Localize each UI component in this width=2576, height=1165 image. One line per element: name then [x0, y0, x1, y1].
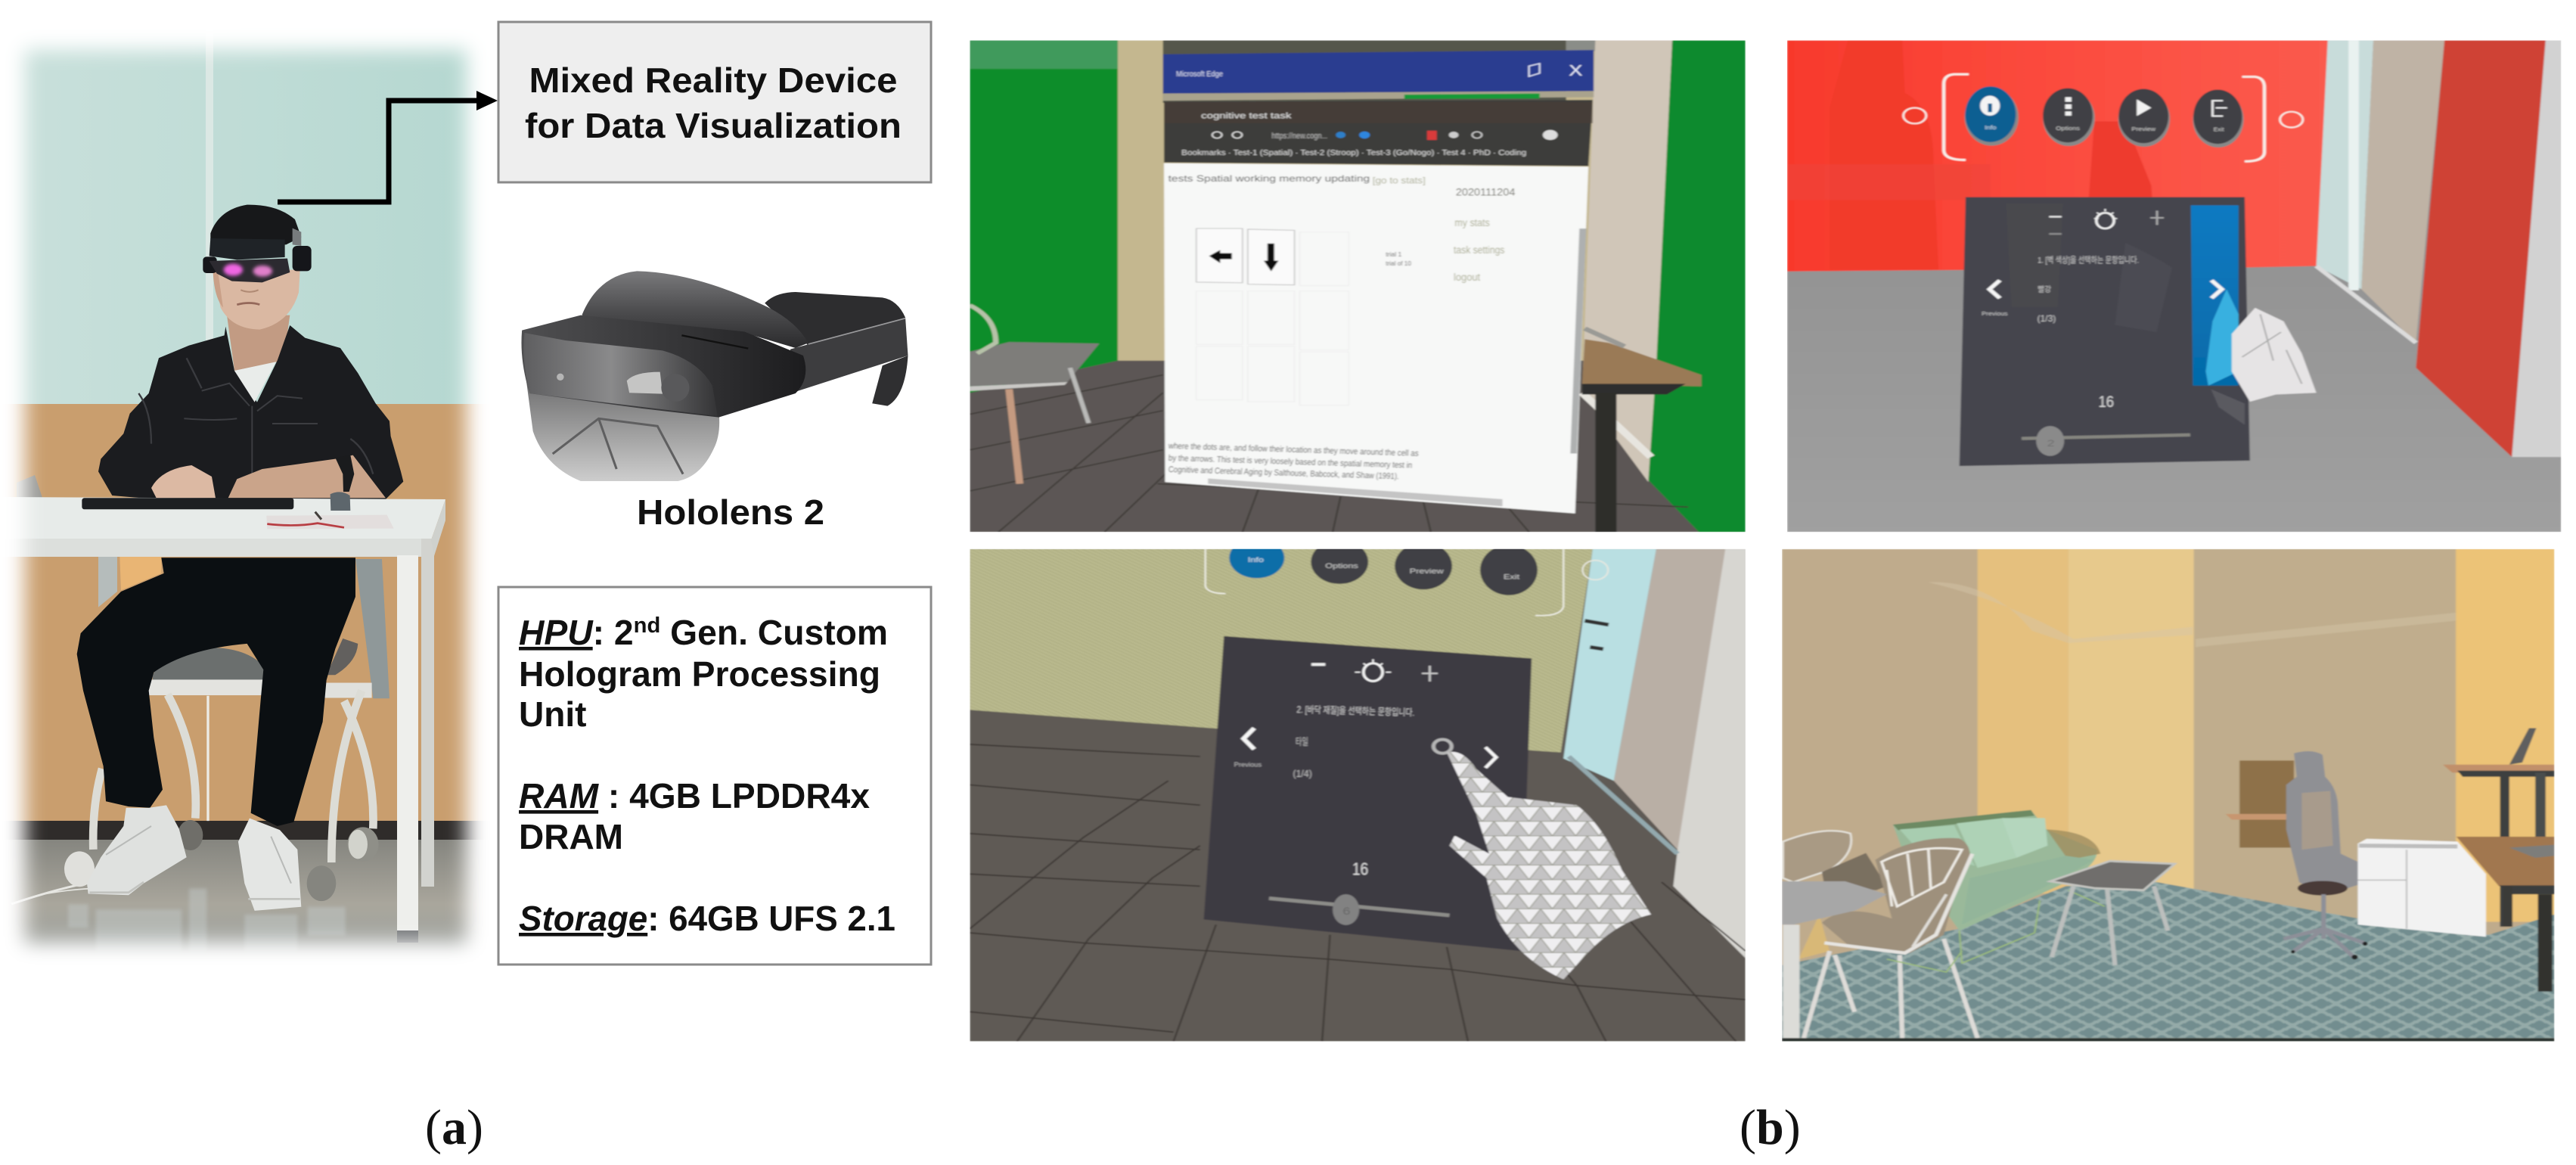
jacket and head — [98, 205, 403, 499]
room background — [970, 40, 1746, 532]
floor tile lines — [970, 375, 1688, 532]
floor tile lines — [970, 744, 1746, 1042]
browser page: task settings — [1454, 244, 1504, 256]
label box: mixed reality device: for Data Visualization — [525, 106, 902, 145]
partial menu at top: Info — [1248, 556, 1264, 564]
button: exit: Exit — [2214, 126, 2224, 132]
chair and legs of the seated person — [45, 556, 390, 951]
question panel: Previous — [1982, 310, 2008, 317]
menu brackets — [1904, 74, 2303, 161]
button: preview: Preview — [2131, 126, 2155, 132]
room background — [970, 549, 1746, 1042]
question panel: 1. [벽 색상]을 선택하는 문항입니다. — [2038, 255, 2139, 265]
hands, watch and desk items — [82, 455, 394, 529]
hand mesh — [1447, 752, 1651, 980]
browser page: trial 1 — [1386, 251, 1401, 258]
spec: RAM: RAM : 4GB LPDDR4x — [519, 776, 870, 815]
wicker chairs and table — [1782, 831, 1978, 1038]
hand mesh — [2206, 289, 2317, 425]
browser page: tests Spatial working memory updating — [1169, 174, 1370, 184]
label: Hololens 2: Hololens 2 — [637, 492, 824, 532]
wall shelf — [2226, 760, 2312, 848]
question panel: 6 — [1342, 906, 1351, 917]
question panel: 16 — [2099, 392, 2114, 411]
panel: virtual office room — [1782, 549, 2555, 1042]
browser page — [1164, 163, 1588, 514]
browser page: where the dots are, and follow their location as they move around the cell as — [1168, 441, 1419, 458]
walls — [1782, 549, 2555, 1042]
question panel: 2. [바닥 재질]을 선택하는 문항입니다. — [1296, 704, 1415, 719]
partial menu at top: Options — [1325, 562, 1358, 570]
panel: photo of seated person wearing headset — [0, 23, 499, 968]
menu buttons — [1965, 86, 2244, 148]
label box: mixed reality device — [498, 22, 931, 182]
spec: HPU — [519, 613, 888, 734]
spec: storage: Storage: 64GB UFS 2.1 — [519, 899, 895, 938]
button: options: Options — [2056, 125, 2080, 131]
desk on the right — [1582, 328, 1702, 532]
browser page: [go to stats] — [1373, 176, 1426, 186]
wall and floor background — [0, 23, 499, 968]
browser page: by the arrows. This test is very loosely based on the spatial memory test in — [1168, 453, 1413, 471]
question panel: 2 — [2047, 439, 2055, 449]
spec: RAM — [519, 776, 870, 856]
question panel: 빨강 — [2038, 284, 2051, 294]
browser page: 2020111204 — [1456, 186, 1515, 198]
panel: question panel with pointing hand — [970, 538, 1746, 1042]
desk — [0, 497, 445, 943]
partial menu at top: Preview — [1410, 567, 1445, 575]
browser toolbar — [1164, 100, 1593, 166]
spec: HPU: Unit — [519, 694, 586, 734]
carpet floor — [1782, 882, 2555, 1038]
browser toolbar: cognitive test task — [1201, 111, 1292, 121]
specifications box — [498, 587, 931, 965]
icon: Hololens 2 headset — [521, 271, 908, 481]
chair — [45, 556, 390, 901]
spec: HPU: nd — [634, 614, 660, 638]
spec: HPU: HPU: 2 — [519, 613, 633, 652]
browser title bar: Microsoft Edge — [1176, 70, 1223, 78]
spec: HPU: Hologram Processing — [519, 654, 880, 694]
question panel — [1204, 636, 1532, 951]
button: preview — [2118, 89, 2170, 147]
label box: mixed reality device: Mixed Reality Device — [529, 61, 897, 100]
browser title bar: X — [1569, 61, 1583, 79]
spec: HPU: Gen. Custom — [660, 613, 888, 652]
browser page: logout — [1454, 271, 1480, 283]
room background — [1787, 40, 2561, 532]
question panel: 16 — [1352, 859, 1368, 879]
sneakers — [68, 805, 346, 951]
caption (a): (a) — [425, 1100, 483, 1155]
button: info: Info — [1985, 124, 1996, 130]
panel: browser task view in green room — [970, 40, 1746, 532]
button: options — [2043, 89, 2095, 146]
standing desks and laptop — [2443, 728, 2555, 992]
browser page: Cognitive and Cerebral Aging by Salthouse, Babcock, and Shaw (1991). — [1168, 465, 1399, 481]
question panel: (1/3) — [2038, 313, 2056, 324]
task grid with arrows — [1195, 228, 1296, 286]
browser page: trial of 10 — [1386, 260, 1411, 268]
partial menu at top: Exit — [1504, 573, 1520, 581]
caption (b): (b) — [1740, 1100, 1801, 1155]
browser toolbar: Bookmarks · Test-1 (Spatial) · Test-2 (Stroop) · Test-3 (Go/Nogo) · Test 4 · PhD · Coding — [1181, 148, 1526, 157]
coffee table — [970, 306, 1099, 484]
question panel: 타일 — [1296, 737, 1308, 747]
white cabinet — [2358, 839, 2486, 937]
arrow from headset to label box — [278, 91, 498, 202]
trousers — [77, 558, 355, 826]
question panel: Previous — [1234, 762, 1262, 769]
button: exit — [2193, 89, 2244, 148]
question panel — [1960, 197, 2250, 466]
spec: RAM: DRAM — [519, 817, 623, 856]
panel: menu and question panel in red room — [1787, 40, 2561, 532]
office chair — [2283, 751, 2368, 959]
coffee table — [2050, 861, 2174, 965]
browser page: my stats — [1454, 217, 1490, 228]
browser title bar — [1163, 50, 1594, 101]
sofa — [1893, 810, 2105, 963]
partial menu at top — [1206, 538, 1608, 616]
button: info — [1965, 86, 2019, 146]
browser toolbar: https://new.cogn... — [1271, 132, 1327, 141]
question panel: (1/4) — [1293, 769, 1312, 779]
